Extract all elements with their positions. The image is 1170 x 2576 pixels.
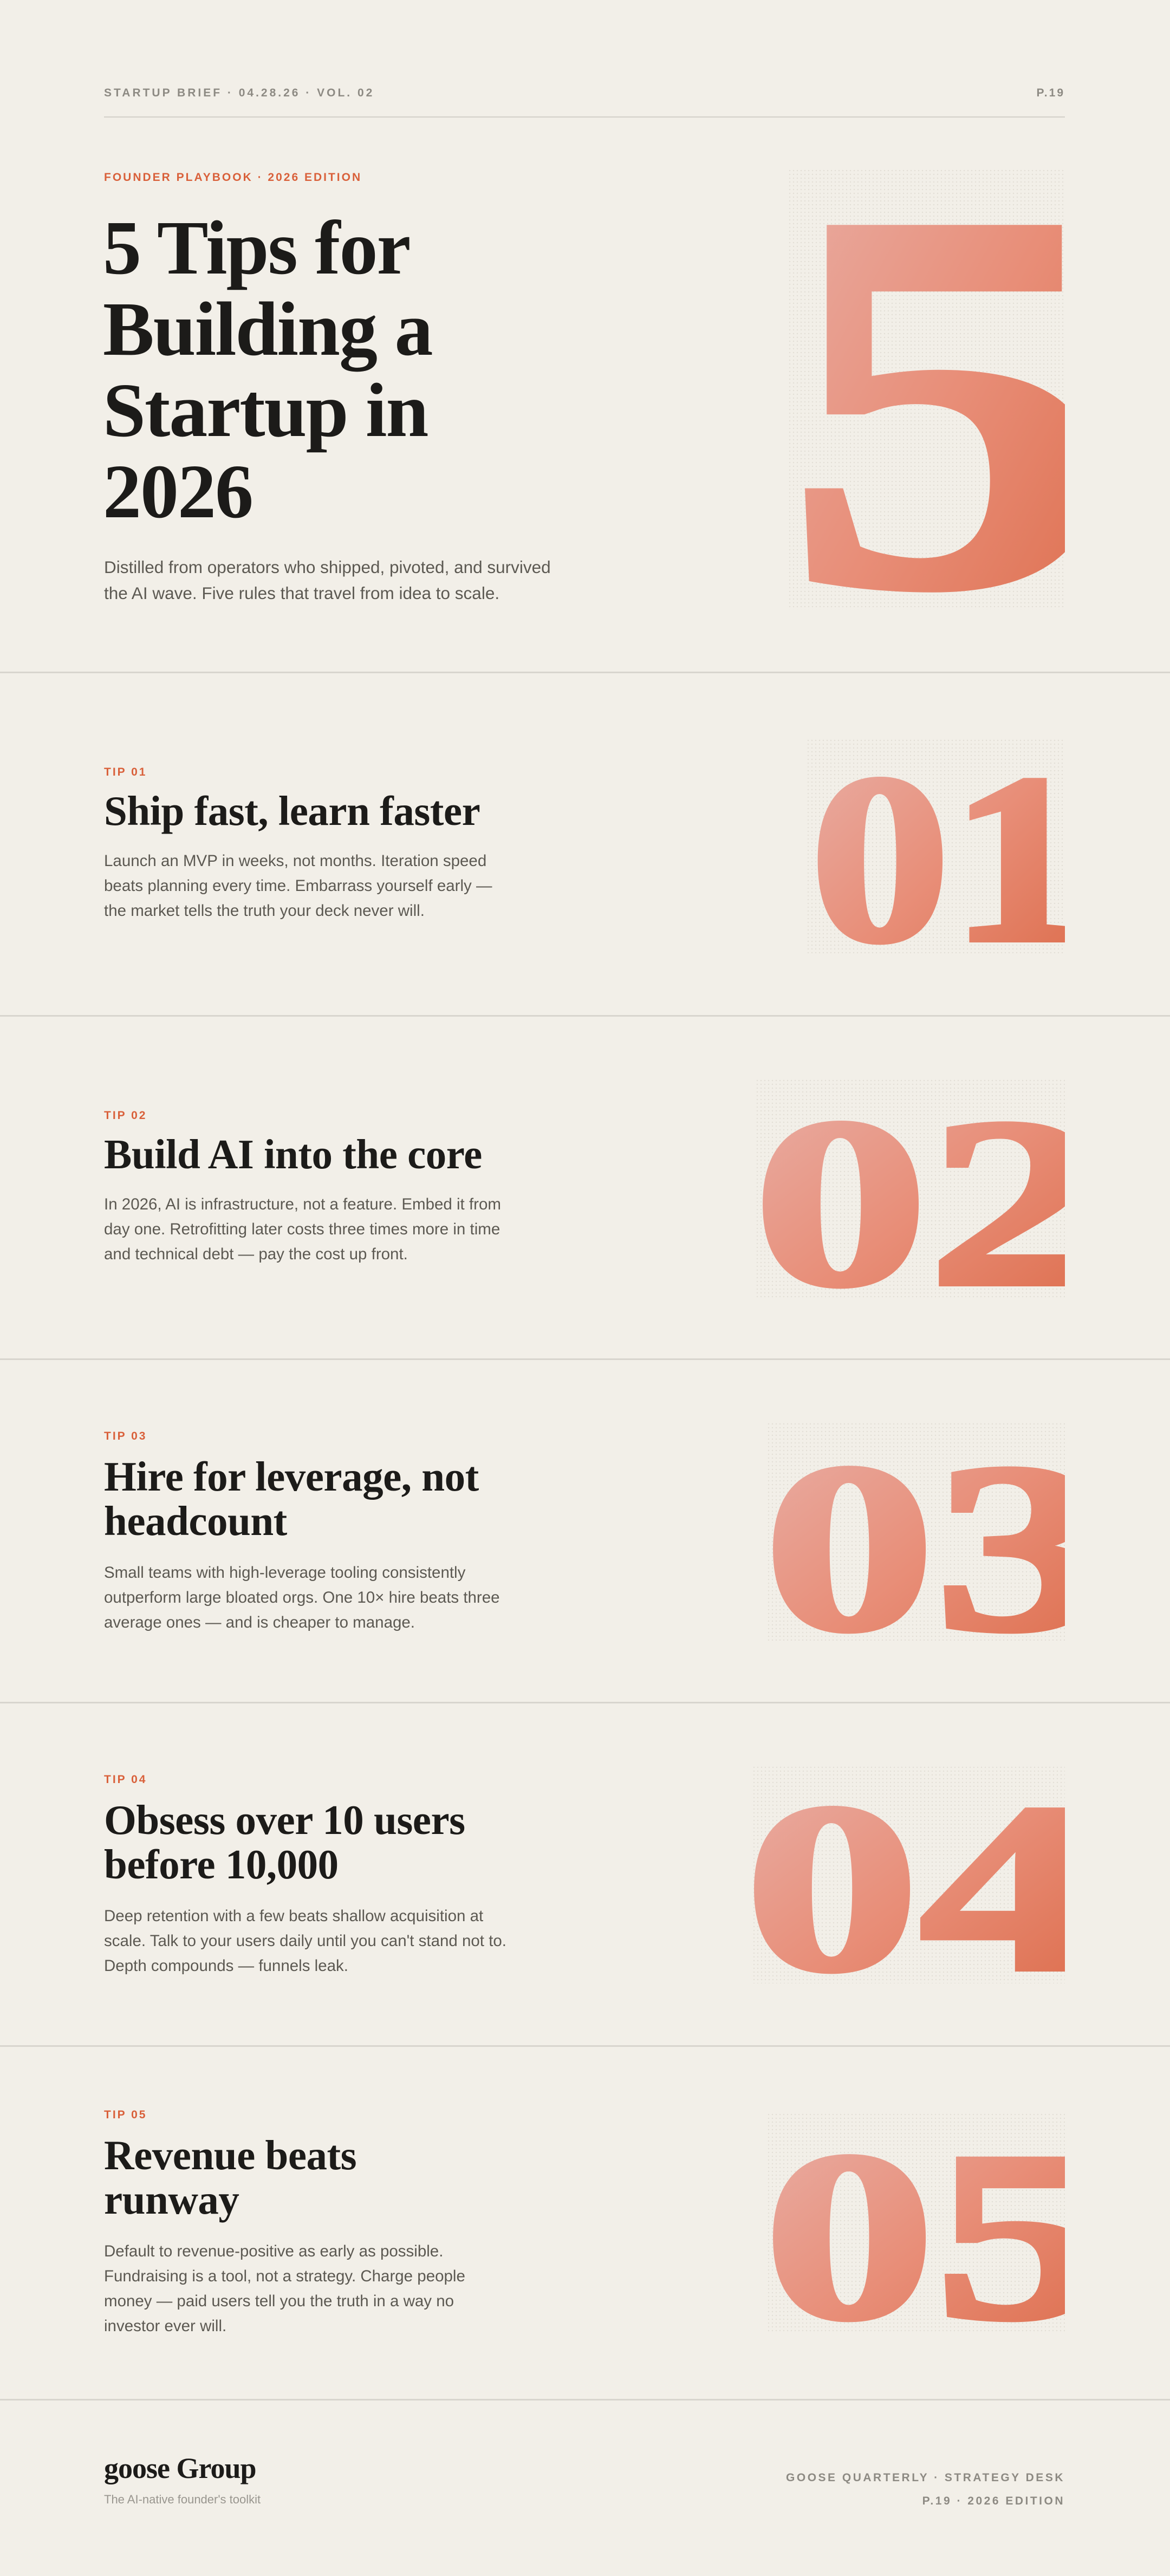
tip body 03 [104,1564,500,1631]
subtitle: Distilled from operators who shipped, pivoted, and survived [104,557,551,577]
tip title 03 [104,1453,479,1544]
header meta: STARTUP BRIEF · 04.28.26 · VOL. 02 [104,87,374,99]
tip body 03: Small teams with high-leverage tooling consistently [104,1564,465,1582]
tip body 02 [104,1195,501,1263]
tip label 03: TIP 03 [104,1430,147,1442]
kicker: FOUNDER PLAYBOOK · 2026 EDITION [104,171,362,184]
tip body 05: Default to revenue-positive as early as possible. [104,2242,443,2260]
tip title 03: Hire for leverage, not [104,1453,479,1500]
footer meta: GOOSE QUARTERLY · STRATEGY DESK [786,2471,1065,2484]
tip body 05 [104,2242,465,2335]
tip title 04: before 10,000 [104,1841,339,1888]
tip body 02: day one. Retrofitting later costs three times more in time [104,1220,500,1238]
tip body 05: money — paid users tell you the truth in a way no [104,2292,454,2310]
tip body 04 [104,1907,506,1975]
subtitle: the AI wave. Five rules that travel from idea to scale. [104,583,499,603]
title: 2026 [103,448,252,534]
tip body 04: Deep retention with a few beats shallow acquisition at [104,1907,483,1925]
footer brand: goose Group [104,2452,256,2484]
tip title 04: Obsess over 10 users [104,1797,465,1843]
footer meta: P.19 · 2026 EDITION [922,2495,1065,2507]
tip body 01: the market tells the truth your deck never will. [104,902,425,920]
tip body 01: Launch an MVP in weeks, not months. Iteration speed [104,852,486,870]
tip body 01 [104,852,492,920]
tip label 04: TIP 04 [104,1773,147,1786]
tip body 05: Fundraising is a tool, not a strategy. Charge people [104,2267,465,2285]
tip title 05: Revenue beats [104,2132,356,2178]
page number: P.19 [1037,87,1065,99]
title: 5 Tips for [103,205,410,290]
title: Building a [103,286,432,372]
tip label 01: TIP 01 [104,766,147,778]
tip body 02: and technical debt — pay the cost up front. [104,1245,408,1263]
tip body 03: average ones — and is cheaper to manage. [104,1614,415,1631]
tip title 03: headcount [104,1498,287,1544]
title: Startup in [103,367,427,453]
tip body 05: investor ever will. [104,2317,226,2335]
panel: tip 04 [104,1766,1065,1983]
tip body 03: outperform large bloated orgs. One 10× hire beats three [104,1589,500,1606]
tip title 02: Build AI into the core [104,1131,482,1178]
tip label 02: TIP 02 [104,1109,147,1122]
tip body 04: scale. Talk to your users daily until you can't stand not to. [104,1932,506,1950]
tip body 02: In 2026, AI is infrastructure, not a feature. Embed it from [104,1195,501,1213]
panel: tip 02 [104,1079,1065,1298]
tip body 04: Depth compounds — funnels leak. [104,1957,348,1975]
footer meta [786,2471,1065,2507]
panel: tip 03 [104,1423,1065,1642]
subtitle [104,557,551,603]
tip title 05: runway [104,2176,239,2223]
tip title 05 [104,2132,356,2223]
tip body 01: beats planning every time. Embarrass yourself early — [104,877,492,895]
title [103,205,432,534]
tip title 01: Ship fast, learn faster [104,788,480,834]
panel: tip 01 [104,739,1065,953]
tip title 04 [104,1797,465,1888]
tip label 05: TIP 05 [104,2109,147,2121]
footer tagline: The AI-native founder's toolkit [104,2493,261,2506]
panel: tip 05 [104,2109,1065,2335]
